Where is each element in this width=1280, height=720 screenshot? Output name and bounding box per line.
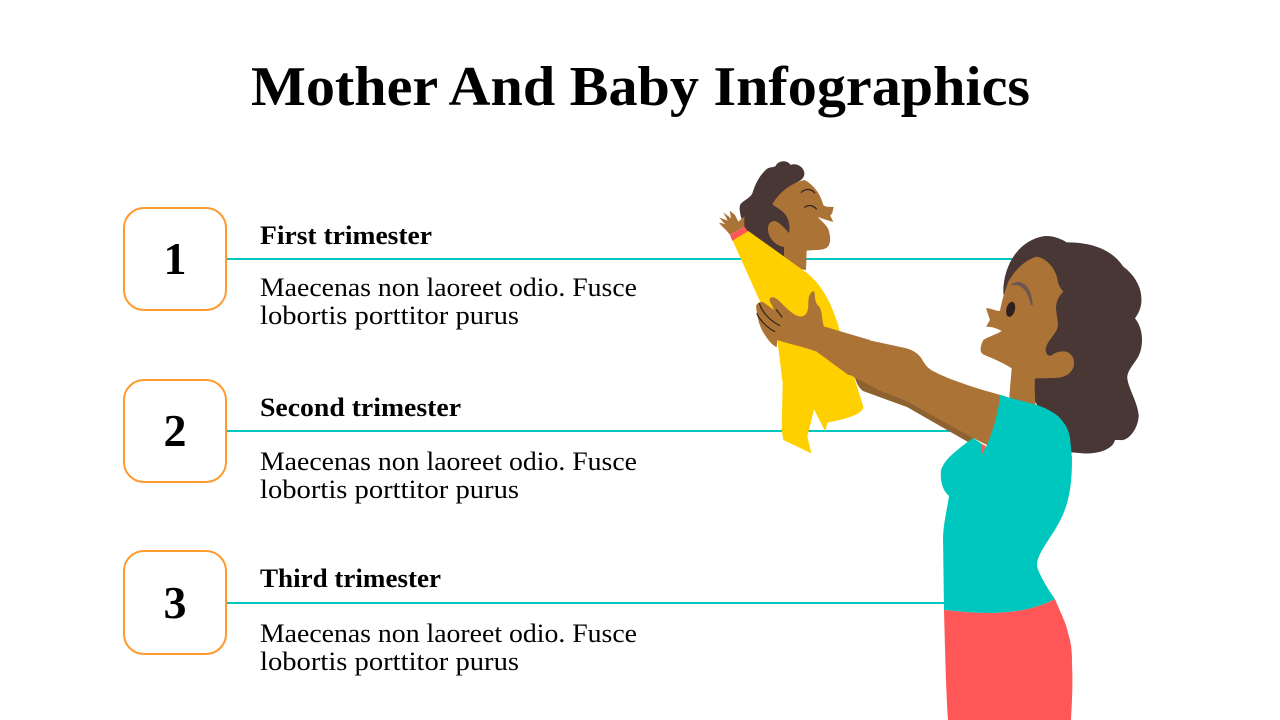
text block 2: lobortis porttitor purus [260,475,519,504]
mother eye [1005,301,1017,318]
mother hands [756,291,870,375]
text block 1: lobortis porttitor purus [260,301,519,330]
text block 1 [260,273,637,330]
heading: third trimester: Third trimester [260,564,441,593]
step 1: first trimester [124,208,1012,330]
baby sleeve cuff [730,227,748,241]
baby face and neck [768,180,834,270]
mother face and neck [981,257,1074,412]
text block 3: lobortis porttitor purus [260,647,519,676]
number box 1: 1 [164,233,186,284]
title: Mother And Baby Infographics [251,56,1030,118]
mother top inner sliver [982,444,986,454]
mother top [941,395,1072,613]
number box 1 [124,208,226,310]
baby yellow outfit [733,231,863,453]
text block 3 [260,619,637,676]
heading: second trimester: Second trimester [260,393,461,422]
text block 2 [260,447,637,504]
baby hair [740,161,804,261]
number box 3 [124,551,226,654]
number box 3: 3 [164,577,186,628]
number box 2 [124,380,226,482]
mother skirt [944,599,1072,720]
number box 2: 2 [164,405,186,456]
mother hair [1003,236,1142,453]
mother arm [817,327,1008,447]
text block 3: Maecenas non laoreet odio. Fusce [260,619,637,648]
arm shadow [850,370,976,442]
text block 2: Maecenas non laoreet odio. Fusce [260,447,637,476]
step 3: third trimester [124,551,946,676]
text block 1: Maecenas non laoreet odio. Fusce [260,273,637,302]
finger lines [757,303,782,332]
baby raised hand [719,211,744,235]
baby eyebrow and eye [801,189,817,209]
heading: first trimester: First trimester [260,221,432,250]
step 2: second trimester [124,380,975,504]
illustration: mother lifting baby [719,161,1142,720]
mother eyebrow [1010,282,1033,306]
